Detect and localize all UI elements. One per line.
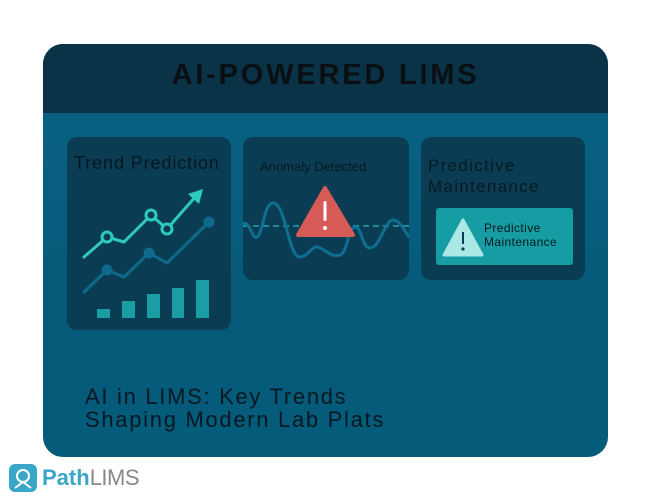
icon: red warning triangle (298, 188, 353, 235)
heading: Anomaly Detected (260, 159, 366, 174)
bottom text block: AI in LIMS: Key Trends (85, 384, 347, 409)
panel: predictive maintenance (421, 137, 585, 280)
bottom text block: Shaping Modern Lab Plats (85, 407, 385, 432)
heading (428, 156, 540, 196)
bottom text block (85, 384, 385, 432)
wave chart (243, 203, 409, 257)
heading: Maintenance (428, 177, 540, 196)
callout: predictive maintenance box: Maintenance (484, 235, 557, 249)
logo text: PathLIMS (42, 465, 139, 490)
callout: predictive maintenance box (436, 208, 573, 265)
chart: upper trend line (84, 189, 203, 257)
callout: predictive maintenance box: Predictive (484, 221, 541, 235)
bar chart (97, 280, 209, 318)
chart: lower trend line (84, 218, 213, 292)
panel: anomaly (243, 137, 409, 280)
header bar (43, 44, 608, 113)
heading: Trend Prediction (74, 153, 220, 173)
heading: Predictive (428, 156, 516, 175)
title: AI-POWERED LIMS (172, 59, 479, 91)
panel: trend prediction (67, 137, 231, 330)
main card (43, 44, 608, 457)
icon: logo (9, 464, 37, 492)
